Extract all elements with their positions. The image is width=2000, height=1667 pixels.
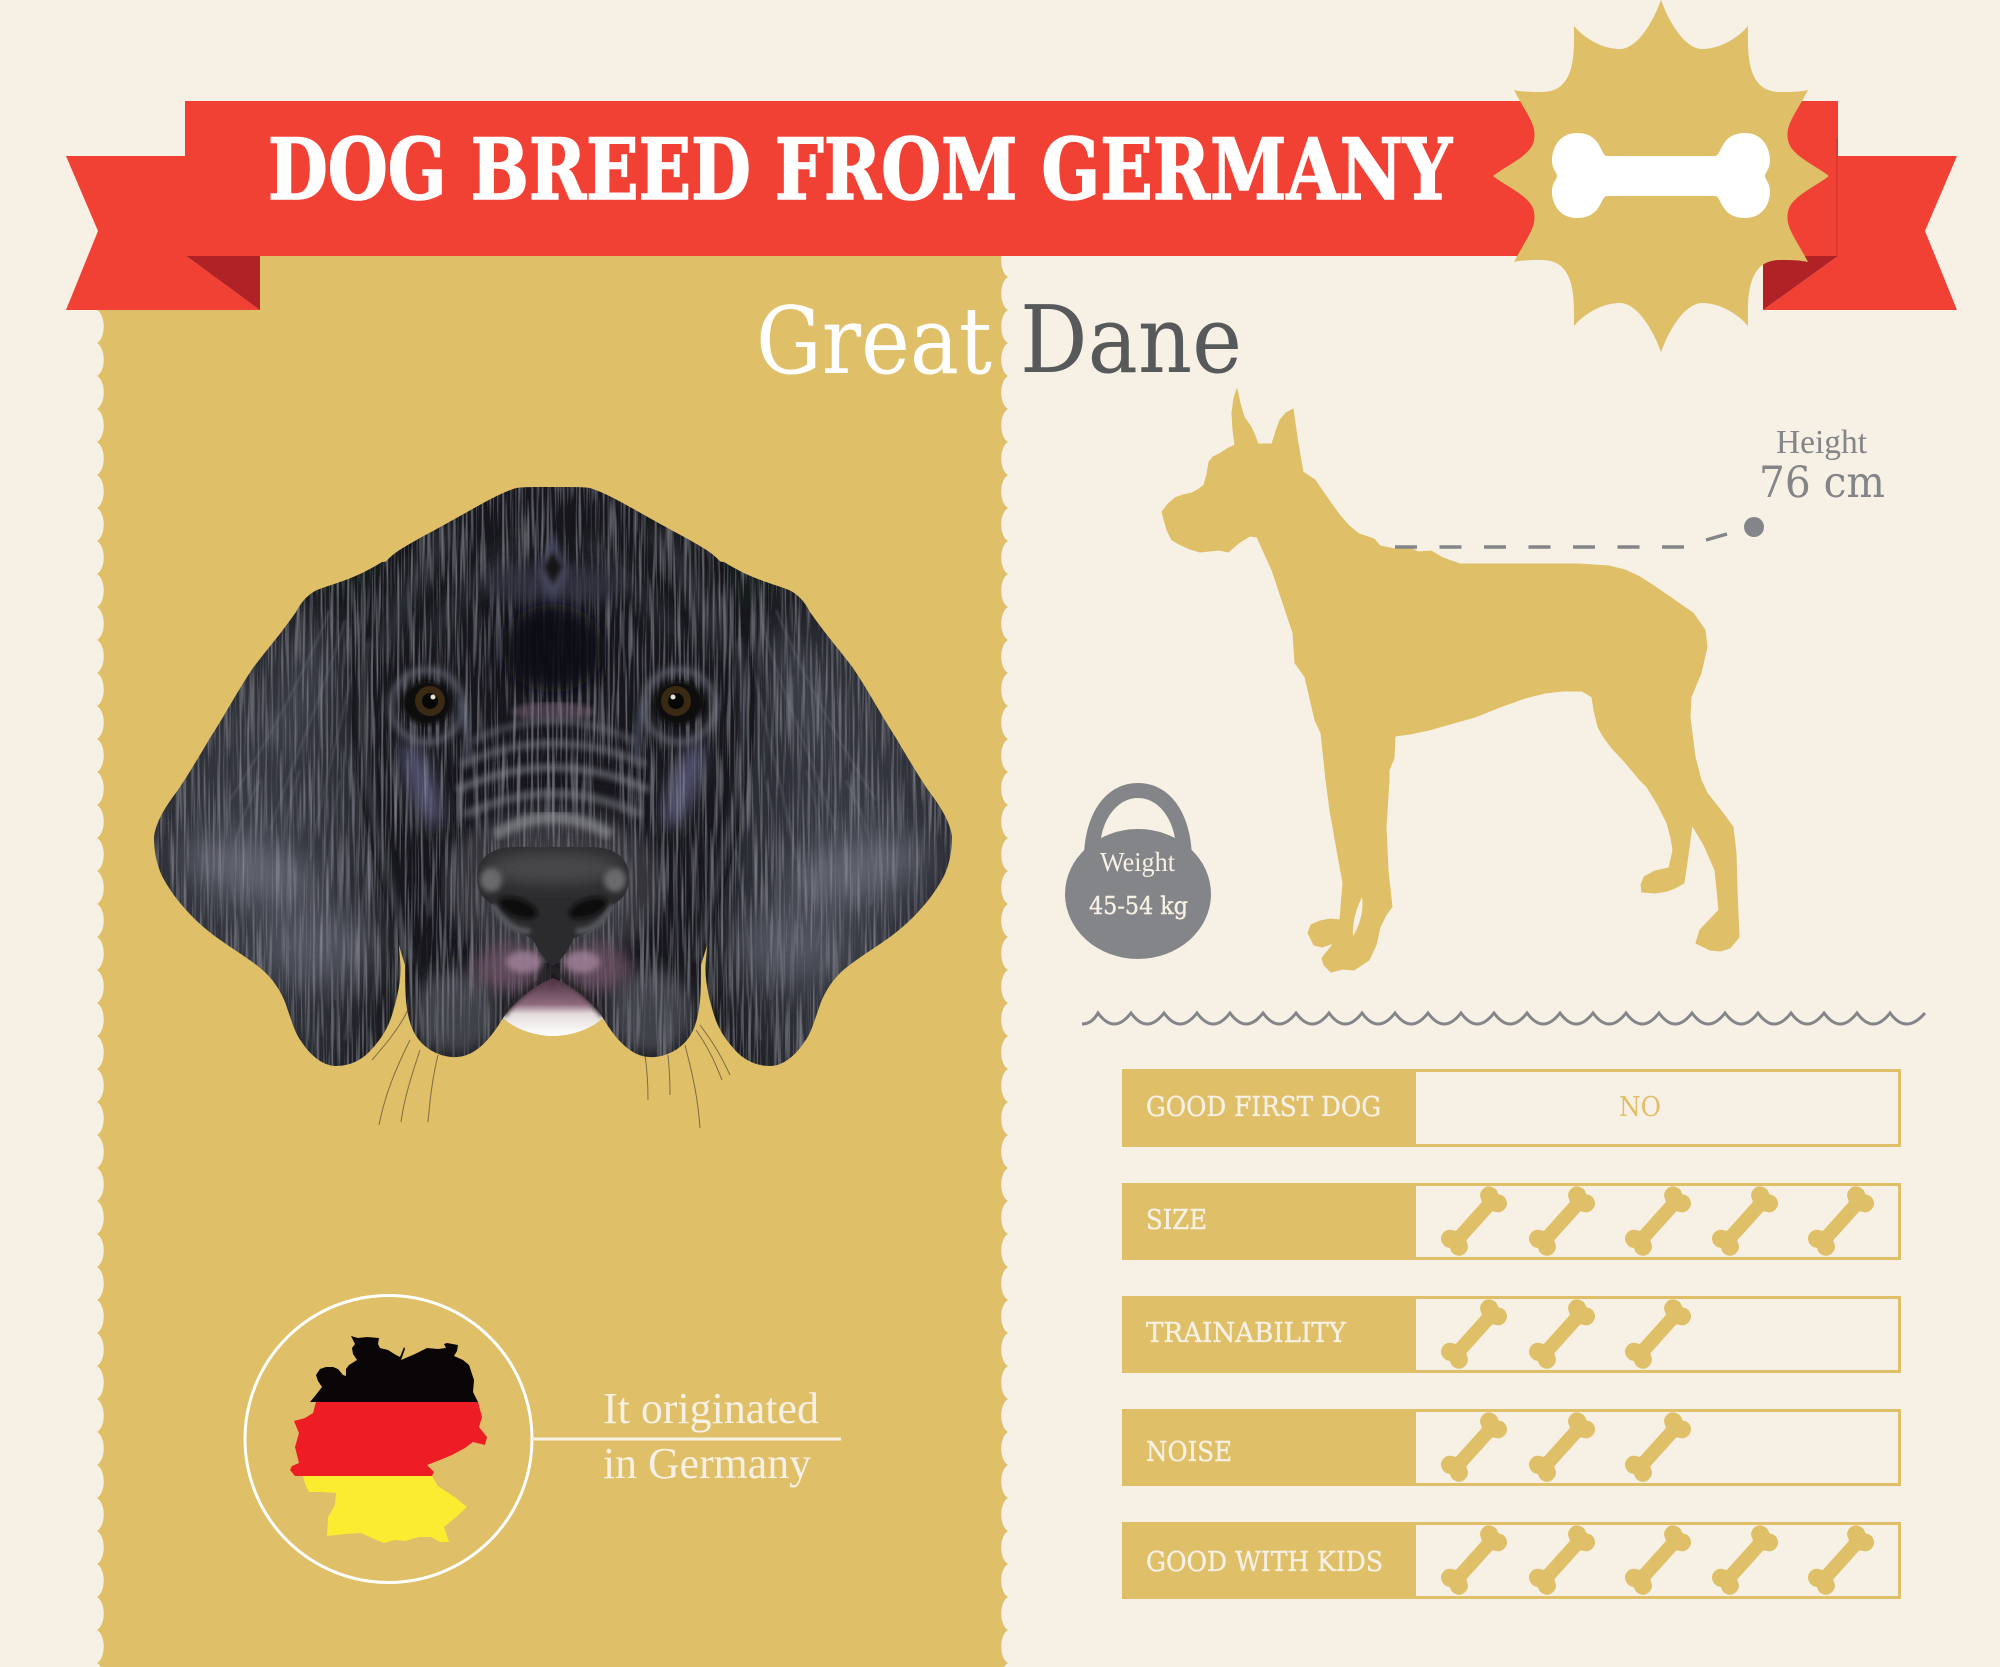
wavy divider (1082, 1013, 1925, 1024)
rating: five bones (1437, 1522, 1878, 1598)
head and ears fur (154, 487, 952, 1066)
table row: good with kids (1122, 1522, 1900, 1599)
table row: noise: NOISE (1146, 1437, 1232, 1468)
mouth and chin (474, 944, 632, 1036)
table row: good first dog: GOOD FIRST DOG (1146, 1092, 1381, 1123)
table row: good with kids: GOOD WITH KIDS (1146, 1547, 1383, 1578)
origin callout (532, 1384, 841, 1488)
rating: three bones (1437, 1409, 1695, 1485)
badge: gold burst with bone (1493, 0, 1829, 352)
forehead marking (483, 530, 623, 692)
eyes (402, 681, 704, 725)
title: DOG BREED FROM GERMANY (268, 120, 1453, 219)
panel: gold left column with scalloped edges (96, 255, 1009, 1667)
nose (477, 847, 629, 966)
table row: trainability (1122, 1296, 1900, 1373)
rating: three bones (1437, 1296, 1695, 1372)
weight kettlebell: 45-54 kg (1089, 892, 1188, 920)
origin: Germany map in circle (245, 1296, 532, 1582)
slit between front legs (1353, 897, 1363, 936)
weight kettlebell: Weight (1100, 847, 1175, 877)
dog silhouette (1162, 389, 1739, 972)
banner ribbon (66, 101, 1957, 310)
muzzle wrinkles (441, 702, 665, 963)
origin callout: It originated (603, 1384, 819, 1433)
table row: good first dog (1122, 1069, 1900, 1147)
map: red stripe (290, 1402, 487, 1476)
rating: five bones (1437, 1183, 1878, 1259)
breed name: Dane (1020, 286, 1242, 394)
map: black stripe (310, 1336, 478, 1402)
origin callout: in Germany (603, 1439, 811, 1488)
weight kettlebell (1065, 783, 1211, 959)
map: yellow stripe (303, 1476, 467, 1543)
table row: good first dog: NO (1619, 1092, 1661, 1123)
table row: noise (1122, 1409, 1900, 1486)
table row: trainability: TRAINABILITY (1146, 1318, 1347, 1349)
table row: size (1122, 1183, 1900, 1260)
whiskers (372, 1010, 730, 1128)
breed name: Great (756, 287, 992, 395)
height callout: 76 cm (1759, 458, 1885, 508)
height callout (1395, 424, 1885, 547)
illustration: dog face portrait (154, 487, 952, 1128)
icon: white bone (1552, 133, 1770, 218)
breed name (756, 286, 1242, 395)
table row: size: SIZE (1146, 1205, 1207, 1236)
height callout: Height (1776, 424, 1868, 461)
